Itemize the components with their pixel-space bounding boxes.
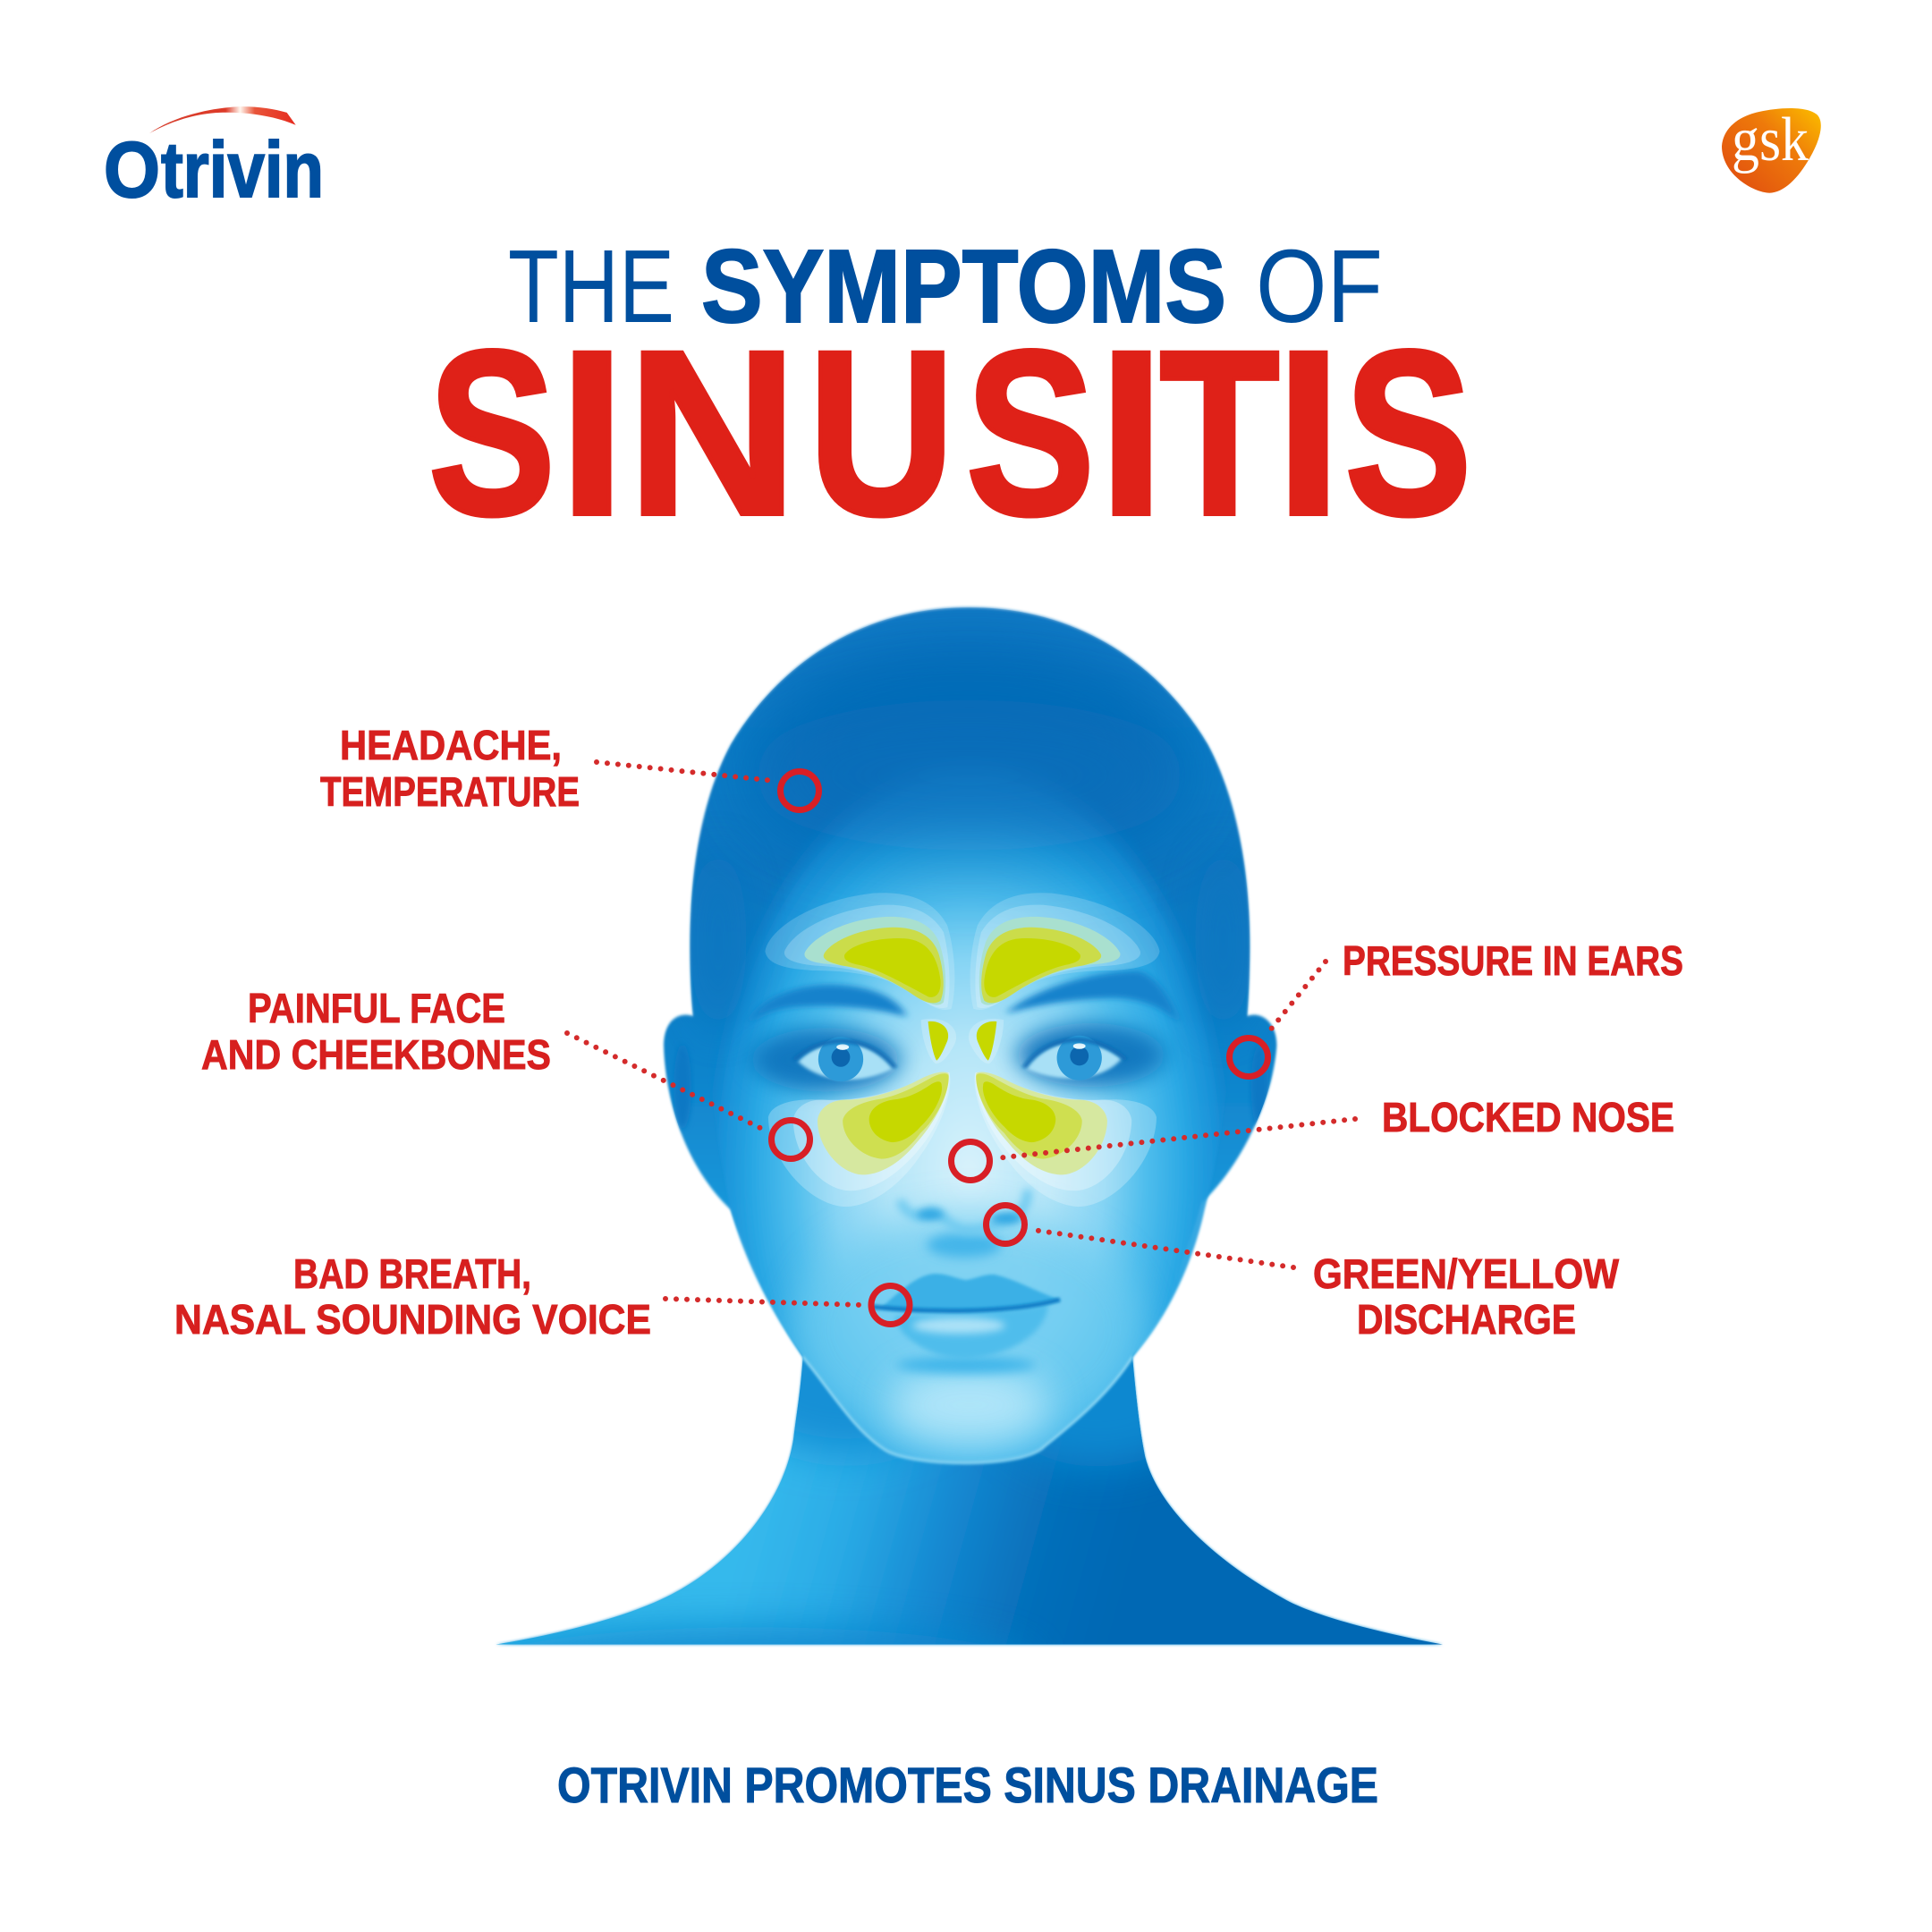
label: TEMPERATURE <box>320 768 580 815</box>
label: NASAL SOUNDING VOICE <box>174 1296 651 1343</box>
ethmoid sinus left <box>921 1019 956 1063</box>
logo wordmark: O <box>104 125 160 214</box>
head, ear and neck shading <box>496 607 1443 1644</box>
leader line <box>665 1299 861 1305</box>
marker ring <box>1229 1038 1268 1077</box>
label: PAINFUL FACE <box>248 985 505 1031</box>
jaw rim light <box>803 1357 1132 1462</box>
label: BAD BREATH, <box>293 1250 531 1297</box>
title line one: OF <box>1256 228 1383 344</box>
sinuses: right side <box>969 893 1159 1207</box>
callout: blocked nose <box>952 1094 1674 1181</box>
logo wordmark: trivin <box>161 125 324 214</box>
eye sockets <box>751 1023 1165 1092</box>
marker ring <box>771 1120 810 1159</box>
leader line <box>1033 1230 1293 1267</box>
marker ring <box>780 771 819 810</box>
maxillary sinus right <box>975 1072 1157 1207</box>
label: PRESSURE IN EARS <box>1343 937 1683 984</box>
lower face and chin light <box>793 1213 1145 1446</box>
forehead and temple shade <box>690 699 1251 1029</box>
illustration: blue head with sinuses <box>496 605 1443 1648</box>
nose <box>900 1190 1028 1258</box>
lips <box>872 1274 1060 1374</box>
title line one: SYMPTOMS <box>701 228 1226 344</box>
callout: painful face and cheekbones <box>201 985 810 1159</box>
ethmoid sinus right <box>969 1019 1004 1063</box>
leader line <box>1269 962 1326 1031</box>
label <box>1313 1250 1620 1343</box>
logo wordmark: gsk <box>1732 106 1809 174</box>
label <box>320 722 580 815</box>
footer tagline: OTRIVIN PROMOTES SINUS DRAINAGE <box>557 1757 1378 1813</box>
leader line <box>597 762 775 781</box>
sinuses: left side <box>765 893 956 1207</box>
title line two: T <box>1159 302 1279 564</box>
label <box>174 1250 651 1343</box>
title <box>428 228 1472 564</box>
logo blob <box>1722 108 1821 193</box>
face glow <box>703 755 1236 1462</box>
marker ring <box>986 1206 1025 1243</box>
leader line <box>567 1033 762 1129</box>
title line two: N <box>628 302 798 564</box>
title line two: I <box>1275 302 1342 564</box>
eyebrows <box>748 971 1180 1023</box>
callout: headache, temperature <box>320 722 819 815</box>
logo: GSK <box>1722 106 1821 193</box>
title line two: U <box>809 302 955 564</box>
label: AND CHEEKBONES <box>201 1031 551 1078</box>
label: BLOCKED NOSE <box>1382 1094 1674 1140</box>
maxillary sinus left <box>768 1072 950 1207</box>
title line two: I <box>1098 302 1165 564</box>
title line one: THE <box>508 228 674 344</box>
title line two: S <box>966 302 1095 564</box>
logo swoosh <box>149 106 296 133</box>
label: GREEN/YELLOW <box>1313 1250 1620 1297</box>
marker ring <box>952 1141 989 1181</box>
frontal sinus left <box>765 893 954 1010</box>
marker ring <box>871 1286 910 1324</box>
title line two: S <box>1345 302 1472 564</box>
callout: bad breath, nasal sounding voice <box>174 1250 910 1343</box>
label <box>201 985 551 1078</box>
head silhouette <box>496 607 1443 1645</box>
callout: pressure in ears <box>1229 937 1683 1077</box>
label: DISCHARGE <box>1357 1296 1576 1343</box>
callout: green/yellow discharge <box>986 1206 1620 1343</box>
title line two: S <box>428 302 555 564</box>
leader line <box>996 1119 1355 1158</box>
frontal sinus right <box>970 893 1159 1010</box>
logo: Otrivin <box>104 106 324 214</box>
right eye <box>1024 1036 1126 1080</box>
label: HEADACHE, <box>340 722 562 768</box>
title line two: I <box>560 302 624 564</box>
left eye <box>794 1037 895 1081</box>
